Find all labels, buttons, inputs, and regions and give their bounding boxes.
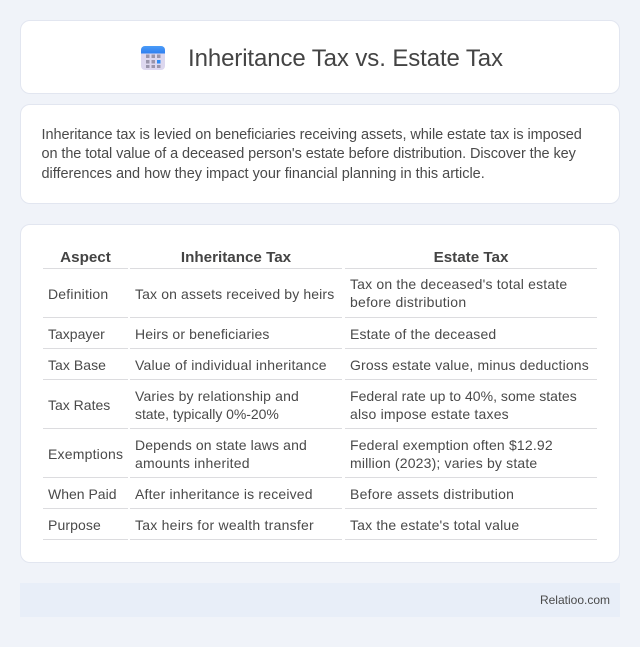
row: Purpose: Tax heirs for wealth transfer — [135, 517, 314, 533]
column heading: Estate Tax: Estate Tax — [434, 249, 508, 266]
panel: introduction — [20, 104, 620, 204]
row: Purpose — [48, 517, 519, 533]
row: Definition: Tax on assets received by heirs — [135, 286, 334, 302]
intro text: on the total value of a deceased person's estate before distribution. Discover the key — [42, 146, 576, 162]
row: Taxpayer: Taxpayer — [48, 326, 105, 342]
row: Definition: Definition — [48, 286, 108, 302]
column heading: Inheritance Tax: Inheritance Tax — [181, 249, 291, 266]
intro text: Inheritance tax is levied on beneficiaries receiving assets, while estate tax is imposed — [42, 127, 582, 143]
footer credit: Relatioo.com — [540, 593, 610, 607]
row: Exemptions: Federal exemption often $12.92 — [350, 437, 553, 453]
header card — [20, 20, 620, 94]
row: Exemptions — [48, 437, 553, 471]
row: Definition: before distribution — [350, 294, 466, 310]
row: Tax Base: Tax Base — [48, 357, 106, 373]
row: Definition: Tax on the deceased's total estate — [350, 276, 567, 292]
row: Taxpayer: Heirs or beneficiaries — [135, 326, 270, 342]
row: Exemptions: million (2023); varies by state — [350, 455, 537, 471]
row: When Paid — [48, 486, 514, 502]
row: Purpose: Tax the estate's total value — [350, 517, 519, 533]
row: Tax Base — [48, 357, 589, 373]
row: Taxpayer — [48, 326, 496, 342]
row: Exemptions: Exemptions — [48, 446, 123, 462]
row: Tax Rates: Federal rate up to 40%, some states — [350, 388, 577, 404]
icon: calendar — [141, 46, 165, 70]
panel: comparison table — [20, 224, 620, 563]
row: Tax Rates — [48, 388, 577, 422]
row: Tax Rates: state, typically 0%-20% — [135, 406, 279, 422]
row: Definition — [48, 276, 567, 310]
row: When Paid: Before assets distribution — [350, 486, 514, 502]
row: Taxpayer: Estate of the deceased — [350, 326, 496, 342]
row: Tax Rates: Tax Rates — [48, 397, 110, 413]
row: Tax Rates: also impose estate taxes — [350, 406, 509, 422]
row: When Paid: When Paid — [48, 486, 116, 502]
row: Tax Base: Value of individual inheritance — [135, 357, 327, 373]
intro text: differences and how they impact your financial planning in this article. — [42, 166, 485, 182]
footer bar — [20, 583, 620, 617]
row: Tax Base: Gross estate value, minus deductions — [350, 357, 589, 373]
row: Exemptions: Depends on state laws and — [135, 437, 307, 453]
row: Purpose: Purpose — [48, 517, 101, 533]
title: Inheritance Tax vs. Estate Tax — [188, 45, 503, 72]
row: Tax Rates: Varies by relationship and — [135, 388, 299, 404]
row: Exemptions: amounts inherited — [135, 455, 250, 471]
column heading: Aspect: Aspect — [60, 249, 111, 266]
intro text — [42, 127, 582, 182]
row: When Paid: After inheritance is received — [135, 486, 313, 502]
